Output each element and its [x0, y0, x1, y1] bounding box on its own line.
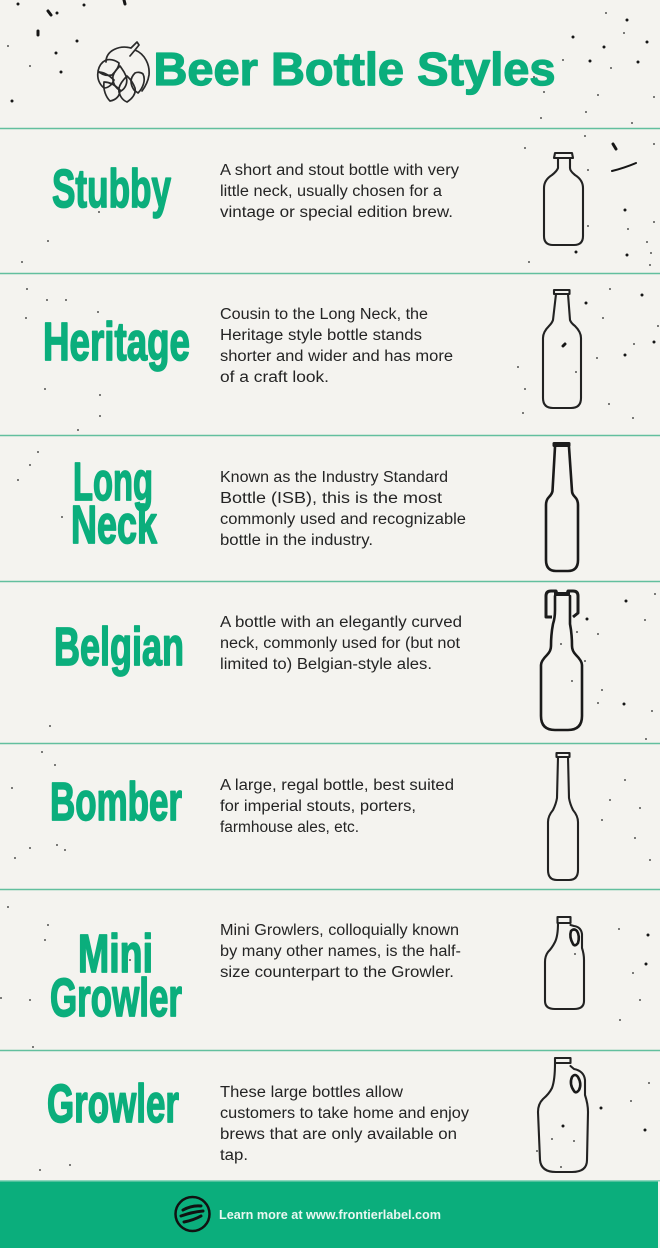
heading: Long Neck: [71, 452, 158, 555]
panel: Mini Growler: [50, 917, 584, 1028]
heading: Mini Growler: Mini: [78, 924, 153, 984]
heading: Heritage: Heritage: [43, 312, 190, 372]
description: Long Neck: Bottle (ISB), this is the most: [220, 490, 443, 507]
description: Stubby: A short and stout bottle with very: [220, 162, 459, 179]
heading: Mini Growler: Growler: [50, 968, 182, 1028]
description: Stubby: vintage or special edition brew.: [220, 204, 453, 221]
description: Growler: These large bottles allow: [220, 1084, 404, 1101]
icon: Frontier Label logo: [176, 1197, 210, 1231]
description: Growler: customers to take home and enjoy: [220, 1105, 469, 1122]
footer banner: [0, 1180, 660, 1248]
icon: heritage bottle: [543, 290, 581, 408]
icon: belgian swing-top bottle: [541, 591, 582, 730]
heading: Belgian: Belgian: [54, 617, 184, 677]
description: Mini Growler: [220, 922, 461, 981]
panel: Heritage: [43, 290, 581, 408]
description: Heritage: [220, 306, 453, 386]
heading: Beer Bottle Styles: Beer Bottle Styles: [154, 43, 556, 95]
description: Belgian: neck, commonly used for (but not: [220, 635, 461, 652]
description: Growler: tap.: [220, 1147, 248, 1164]
description: Heritage: shorter and wider and has more: [220, 348, 453, 365]
heading: Growler: Growler: [47, 1074, 179, 1134]
description: Bomber: for imperial stouts, porters,: [220, 798, 416, 815]
description: Stubby: little neck, usually chosen for a: [220, 183, 442, 200]
heading: Mini Growler: [50, 924, 182, 1028]
description: Belgian: A bottle with an elegantly curved: [220, 614, 462, 631]
icon: stubby bottle: [544, 153, 583, 245]
description: Heritage: of a craft look.: [220, 369, 329, 386]
description: Long Neck: [220, 469, 466, 549]
icon: hop: [98, 42, 149, 102]
description: Mini Growler: Mini Growlers, colloquially known: [220, 922, 459, 939]
description: Long Neck: commonly used and recognizable: [220, 511, 466, 528]
heading: Bomber: Bomber: [50, 772, 182, 832]
heading: Long Neck: Neck: [71, 495, 158, 555]
footer text: Learn more at www.frontierlabel.com: [219, 1208, 441, 1222]
description: Bomber: farmhouse ales, etc.: [220, 819, 359, 836]
icon: bomber bottle: [548, 753, 578, 880]
title: [98, 42, 556, 102]
description: Growler: [220, 1084, 469, 1164]
panel: Belgian: [54, 591, 582, 730]
description: Stubby: [220, 162, 459, 221]
panel: Growler: [47, 1058, 588, 1172]
description: Growler: brews that are only available on: [220, 1126, 457, 1143]
icon: growler: [538, 1058, 588, 1172]
description: Bomber: [220, 777, 454, 836]
description: Long Neck: bottle in the industry.: [220, 532, 373, 549]
description: Heritage: Heritage style bottle stands: [220, 327, 422, 344]
panel: Stubby: [52, 153, 583, 245]
icon: long neck bottle: [546, 442, 578, 571]
panel: Long Neck: [71, 442, 578, 571]
description: Mini Growler: size counterpart to the Growler.: [220, 964, 454, 981]
heading: Long Neck: Long: [73, 452, 153, 512]
description: Bomber: A large, regal bottle, best suited: [220, 777, 454, 794]
description: Mini Growler: by many other names, is the half-: [220, 943, 461, 960]
description: Belgian: [220, 614, 462, 673]
panel: Bomber: [50, 753, 578, 880]
description: Long Neck: Known as the Industry Standard: [220, 469, 448, 486]
icon: mini growler: [545, 917, 584, 1009]
heading: Stubby: Stubby: [52, 159, 171, 219]
description: Belgian: limited to) Belgian-style ales.: [220, 656, 432, 673]
description: Heritage: Cousin to the Long Neck, the: [220, 306, 428, 323]
